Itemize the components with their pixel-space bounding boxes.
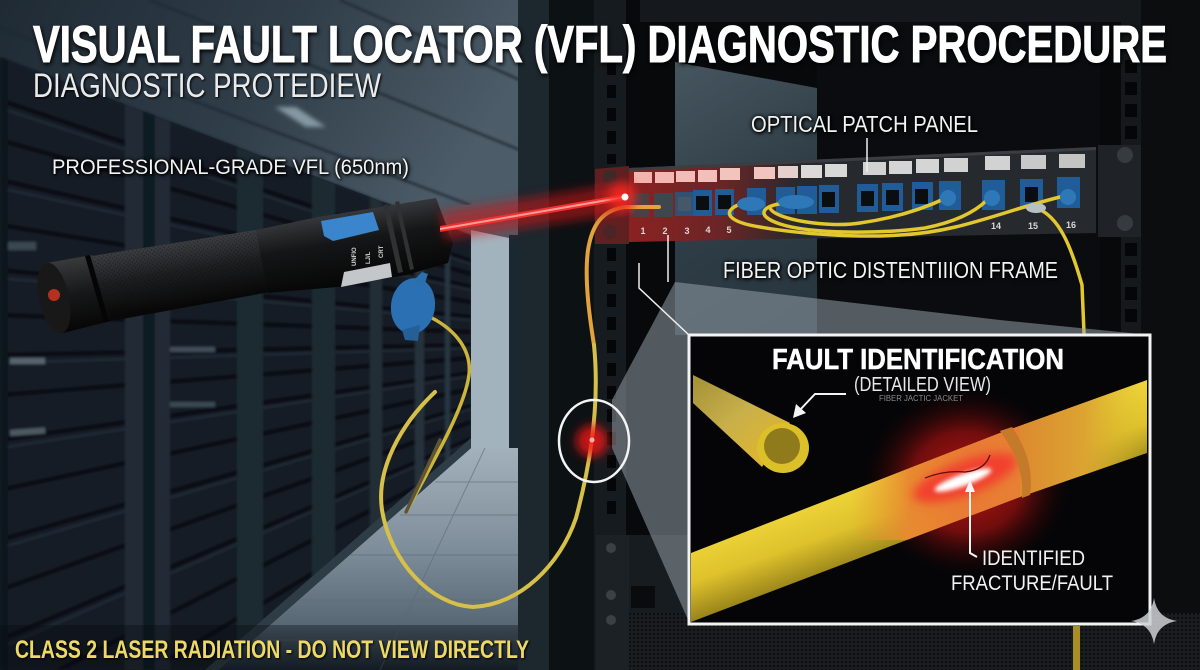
- panel label strips: [634, 154, 1085, 183]
- port numbers: 16: [1066, 220, 1076, 230]
- port numbers: 1: [640, 226, 646, 236]
- port numbers: 15: [1028, 221, 1038, 231]
- blue dust cap: [387, 272, 439, 341]
- mode markings: [352, 245, 385, 266]
- label: fiber optic distribution frame: FIBER OPTIC DISTENTIIION FRAME: [723, 257, 1058, 283]
- grip barrel: [92, 230, 270, 321]
- cut tube section: [693, 375, 809, 473]
- patch cables: [729, 189, 1084, 333]
- port numbers: [640, 220, 1076, 236]
- port numbers: 2: [662, 226, 668, 236]
- cable below inset: [1073, 626, 1080, 670]
- fault glow circle on cable: [559, 400, 629, 482]
- mode markings: LJ/L: [366, 251, 372, 264]
- fault arrow: [965, 480, 977, 557]
- blue switch: [321, 212, 379, 241]
- detailed view caption: (DETAILED VIEW): [854, 374, 991, 396]
- port numbers: 3: [684, 226, 690, 236]
- mode markings: CRT: [379, 245, 385, 258]
- end cap: [32, 260, 76, 336]
- panel: fault identification inset: [689, 335, 1150, 624]
- background: equipment rack: [518, 0, 1200, 670]
- jacket arrow: [793, 394, 846, 418]
- fiber ports: [631, 177, 1080, 217]
- label: optical patch panel: OPTICAL PATCH PANEL: [751, 111, 978, 137]
- sparkle icon: [1131, 598, 1177, 644]
- fault label: [951, 547, 1113, 595]
- main fiber tube: [691, 380, 1147, 622]
- VFL instrument: [32, 198, 453, 336]
- fault label: IDENTIFIED: [982, 547, 1085, 570]
- patch panel: [595, 145, 1141, 244]
- port numbers: 5: [726, 225, 732, 235]
- background: data centre aisle: [0, 0, 520, 670]
- fault label: FRACTURE/FAULT: [951, 572, 1113, 595]
- subtitle: DIAGNOSTIC PROTEDIEW: [33, 67, 381, 105]
- callout leader and light cone: [612, 235, 1150, 622]
- port numbers: 4: [705, 225, 711, 235]
- laser beam: [440, 182, 636, 240]
- red glow: [865, 390, 1069, 574]
- mode markings: UNFIO: [352, 247, 358, 266]
- label: professional-grade VFL: PROFESSIONAL-GRADE VFL (650nm): [52, 156, 409, 179]
- main fiber cable: [381, 207, 659, 607]
- port numbers: 14: [991, 221, 1001, 231]
- inset heading: FAULT IDENTIFICATION: [772, 344, 1064, 376]
- serial sticker: [341, 263, 392, 287]
- small jacket caption: FIBER JACTIC JACKET: [879, 394, 963, 403]
- laser safety warning: CLASS 2 LASER RADIATION - DO NOT VIEW DIRECTLY: [15, 636, 529, 664]
